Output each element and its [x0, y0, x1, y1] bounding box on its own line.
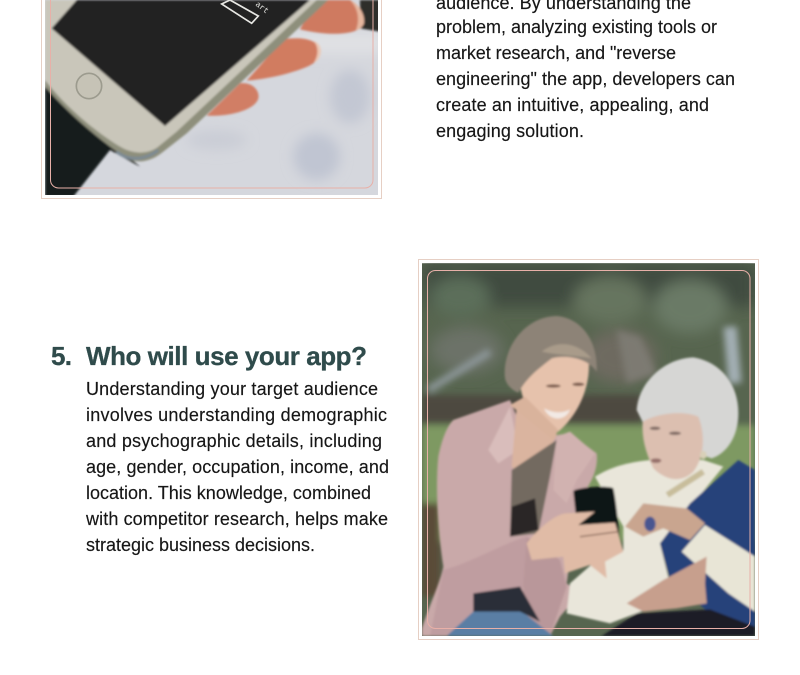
text block: target audience paragraph: with competitor research, helps make [85, 509, 388, 529]
sweater arm [682, 525, 755, 612]
dark trousers [602, 609, 755, 636]
pointing hand [625, 503, 705, 540]
inner rounded outline [428, 270, 750, 628]
text block: app research paragraph: problem, analyzing existing tools or [436, 17, 717, 37]
heading: 5. Who will use your app?: Who will use your app? [86, 341, 367, 371]
holding hand [527, 512, 623, 578]
text block: target audience paragraph: strategic business decisions. [86, 535, 315, 555]
young woman head [520, 353, 589, 432]
necklace [667, 472, 703, 495]
elderly woman hair [637, 357, 738, 458]
phone held [573, 487, 620, 545]
text block: target audience paragraph: location. This knowledge, combined [86, 483, 371, 503]
elderly woman face [642, 413, 703, 479]
photo: young woman showing phone to elderly woman [422, 263, 755, 637]
young woman jacket [422, 400, 597, 636]
text block: app research paragraph: engaging solution. [436, 121, 584, 141]
photo: hand holding smartphone [45, 0, 383, 197]
text block: target audience paragraph: involves understanding demographic [86, 405, 387, 425]
lower hand [627, 557, 707, 612]
heading: 5. Who will use your app?: 5. [51, 341, 72, 371]
navy shawl [660, 460, 755, 636]
text block: target audience paragraph: and psychographic details, including [86, 431, 382, 451]
photo frame: two women with phone [418, 260, 758, 640]
text block: target audience paragraph [85, 379, 389, 555]
inner rounded outline [50, 0, 373, 188]
text block: target audience paragraph: Understanding your target audience [86, 379, 378, 399]
text block: app research paragraph: engineering" the app, developers can [436, 69, 735, 89]
photo frame: hand holding phone [42, 0, 383, 198]
elderly woman sweater [567, 459, 723, 623]
text block: app research paragraph [436, 0, 735, 141]
text block: target audience paragraph: age, gender, occupation, income, and [86, 457, 389, 477]
text block: app research paragraph: create an intuitive, appealing, and [436, 95, 709, 115]
phone screen tiny text: art [253, 0, 270, 16]
text block: app research paragraph: market research, and "reverse [436, 43, 676, 63]
